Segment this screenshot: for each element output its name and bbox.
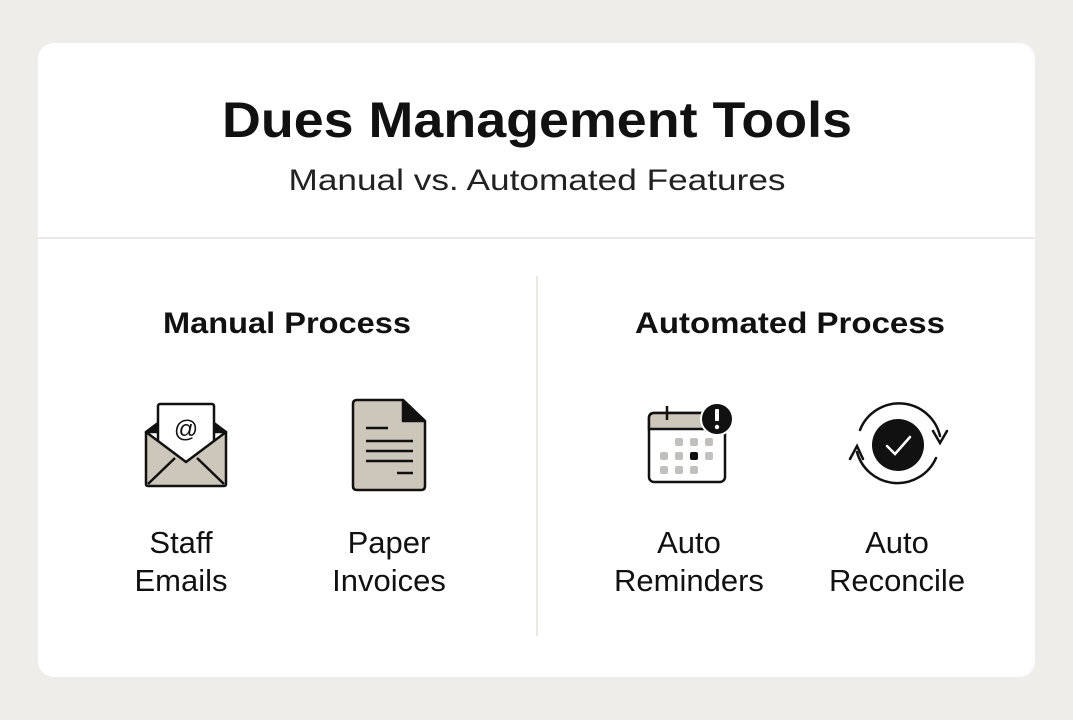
icon: envelope: @ [174,416,198,443]
label: auto reminders: Auto [657,525,721,560]
label: auto reconcile: Reconcile [829,563,965,598]
label: paper invoices: Invoices [332,563,446,598]
icon: calendar reminder [649,403,733,482]
heading: manual process: Manual Process [163,307,411,340]
label: auto reconcile [829,525,965,598]
icon: auto reconcile sync [850,403,947,483]
label: auto reminders: Reminders [614,563,764,598]
label: auto reminders [614,525,764,598]
subtitle: Manual vs. Automated Features [288,164,786,197]
title: Dues Management Tools [222,92,852,148]
icon: envelope [146,404,226,486]
label: staff emails [134,525,228,598]
label: paper invoices [332,525,446,598]
label: paper invoices: Paper [348,525,430,560]
label: auto reconcile: Auto [865,525,929,560]
label: staff emails: Emails [134,563,228,598]
icon: paper invoice [353,400,425,490]
label: staff emails: Staff [149,525,213,560]
heading: automated process: Automated Process [635,307,945,340]
